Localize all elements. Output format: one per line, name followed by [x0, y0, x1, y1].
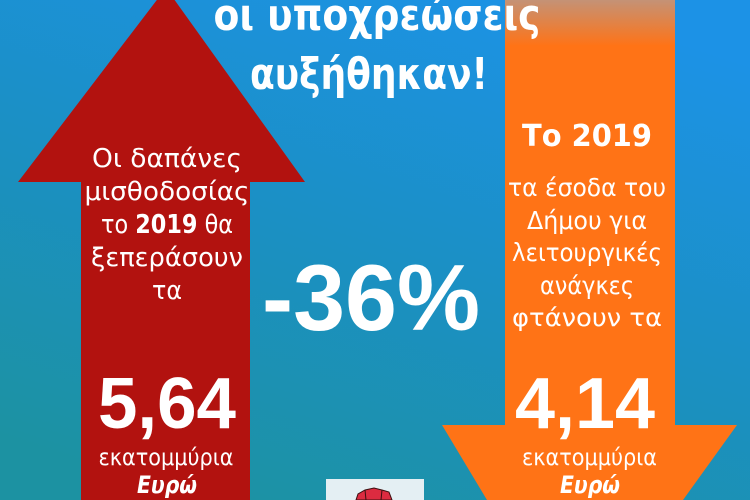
- arrow shape: orange down: [442, 45, 737, 500]
- orange down arrow panel: [442, 0, 737, 500]
- text: euro: Ευρώ: [137, 471, 197, 499]
- icon: red shield emblem: [356, 488, 392, 500]
- text: revenue description: ανάγκες: [540, 271, 634, 300]
- text: payroll description: [84, 144, 250, 306]
- text: payroll description: τα: [152, 276, 182, 306]
- text: revenue description: [508, 173, 666, 332]
- title: αυξήθηκαν!: [250, 49, 488, 100]
- text: euro: Ευρώ: [560, 471, 620, 499]
- number: 5,64: 5,64: [98, 364, 236, 444]
- text: 2019 heading: Το 2019: [522, 119, 652, 154]
- text: million: εκατομμύρια: [522, 445, 657, 471]
- text: payroll description: το 2019 θα: [101, 210, 233, 240]
- title: [214, 0, 540, 100]
- text: payroll description: Οι δαπάνες: [92, 144, 242, 174]
- text: revenue description: Δήμου για: [527, 206, 647, 235]
- number: 4,14: 4,14: [515, 364, 655, 444]
- text: payroll description: μισθοδοσίας: [84, 177, 250, 207]
- big percentage: -36%: [262, 245, 480, 350]
- text: million: εκατομμύρια: [98, 445, 234, 471]
- text: revenue description: λειτουργικές: [512, 238, 662, 267]
- logo box: [326, 479, 424, 500]
- arrow shaft top: fading: [505, 0, 675, 46]
- text: revenue description: τα έσοδα του: [508, 173, 666, 202]
- red up arrow panel: [18, 0, 305, 500]
- arrow shape: red up: [18, 0, 305, 500]
- text: revenue description: φτάνουν τα: [512, 303, 662, 332]
- text: payroll description: ξεπεράσουν: [91, 243, 243, 273]
